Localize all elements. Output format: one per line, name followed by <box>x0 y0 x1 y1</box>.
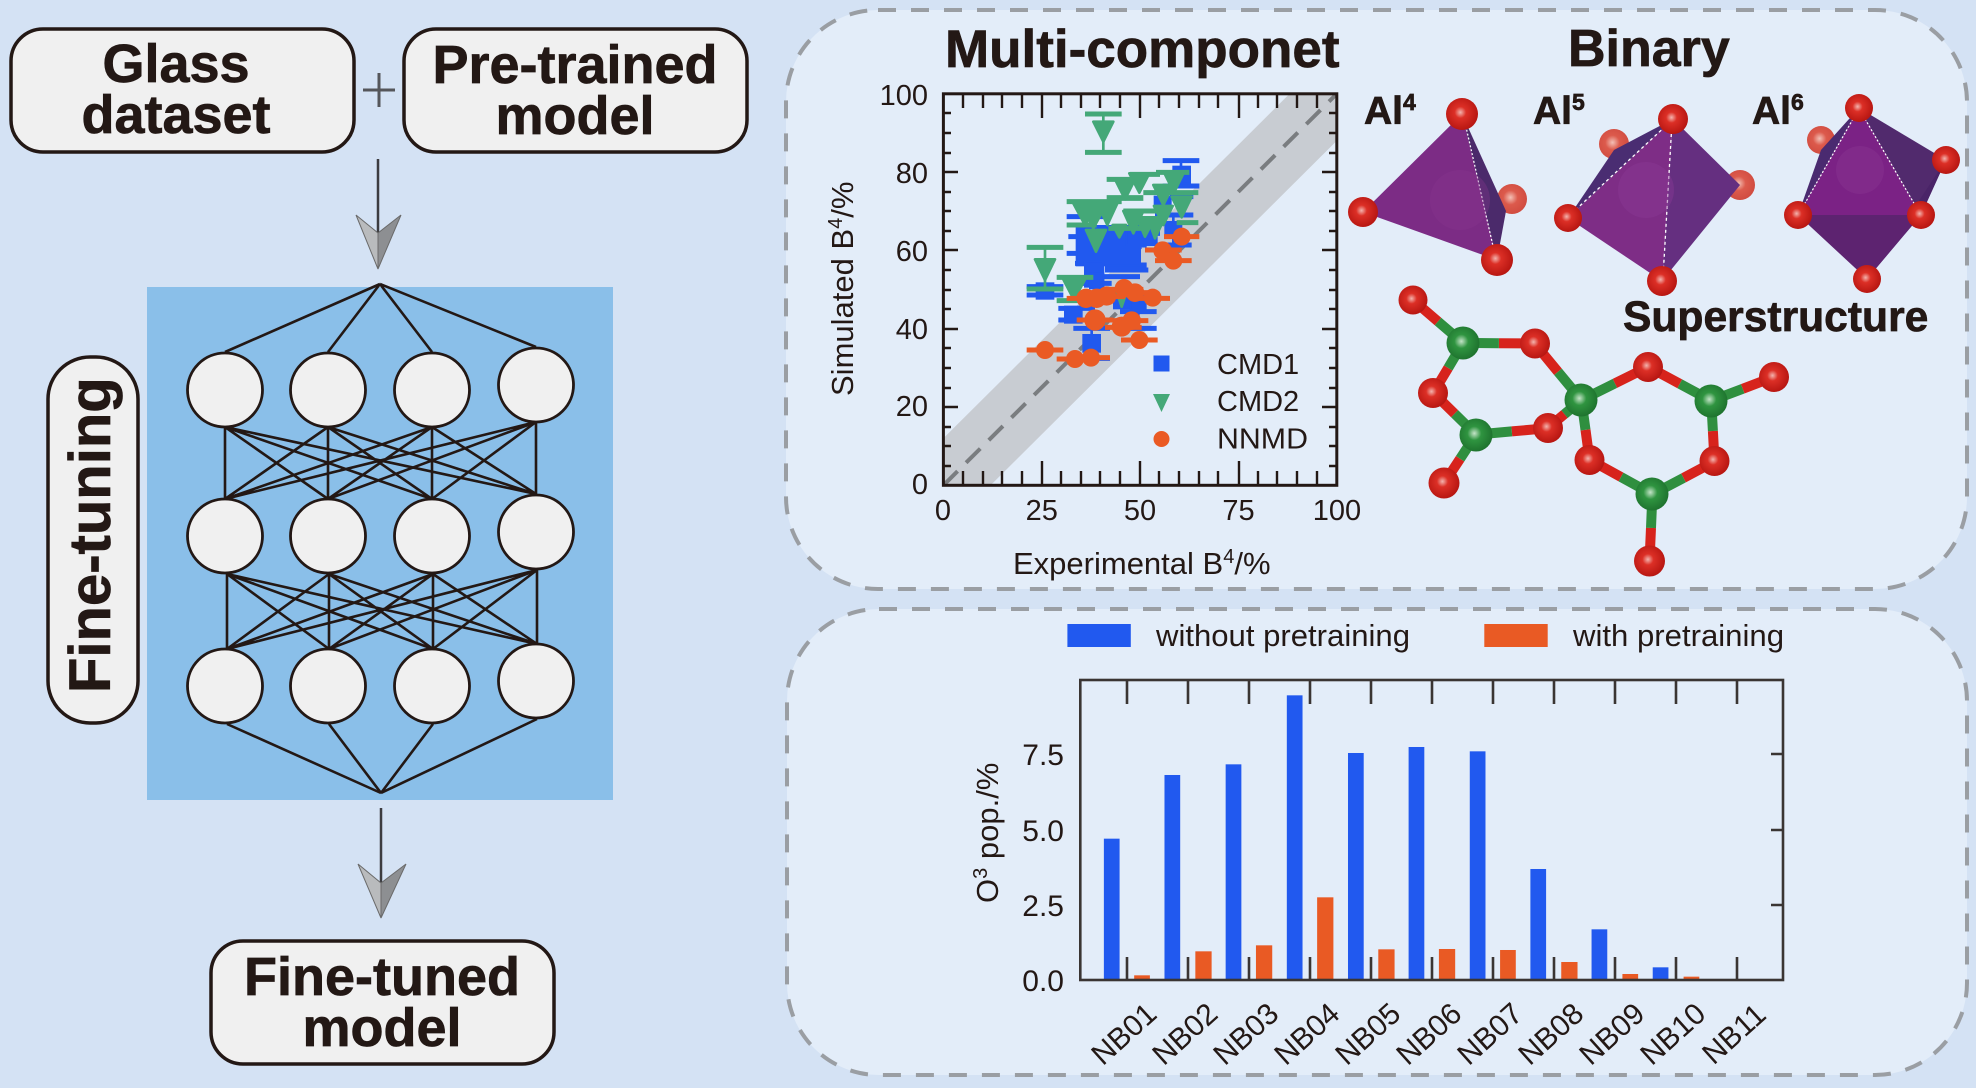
y tick labels: 80 <box>896 158 928 190</box>
y tick labels: 7.5 <box>1022 739 1064 772</box>
box: Fine-tuning <box>48 357 138 723</box>
category labels: NB05 <box>1329 997 1407 1072</box>
chart legend: without pretraining <box>1155 618 1410 653</box>
x tick labels <box>935 495 1361 527</box>
oxygen atoms <box>1398 286 1789 576</box>
chart legend: CMD1 <box>1217 349 1299 381</box>
box: Pre-trained model: model <box>495 86 655 146</box>
icon: Al5 polyhedron <box>1554 104 1755 296</box>
box: Fine-tuning: Fine-tuning <box>58 377 123 693</box>
data points <box>1027 114 1199 368</box>
box: Glass dataset: Glass <box>102 34 250 94</box>
box: Glass dataset <box>11 29 354 152</box>
y tick labels <box>880 80 928 501</box>
label: Al4: Al <box>1364 90 1403 133</box>
tolerance band <box>943 94 1337 485</box>
x tick labels: 50 <box>1124 495 1156 527</box>
bars: with pretraining <box>1134 897 1699 980</box>
network nodes <box>188 348 574 723</box>
box: Fine-tuned model: model <box>302 998 462 1058</box>
category labels: NB07 <box>1451 997 1529 1072</box>
category labels: NB02 <box>1146 997 1224 1072</box>
y axis title: /% <box>825 182 860 218</box>
x axis title: 4 <box>1223 546 1234 568</box>
label: Al5: 5 <box>1572 89 1585 115</box>
box: Fine-tuned model <box>211 941 554 1064</box>
axis ticks <box>943 94 1337 485</box>
box: Pre-trained model: Pre-trained <box>432 35 718 95</box>
axis frame and ticks <box>1080 680 1783 980</box>
arrow: network to fine-tuned model <box>358 808 406 918</box>
CMD2 series <box>1027 114 1198 307</box>
box: Glass dataset: dataset <box>81 85 271 145</box>
category labels: NB11 <box>1696 998 1772 1071</box>
panel: multi-component and binary <box>786 10 1967 589</box>
y axis title: O <box>970 879 1005 903</box>
chart legend <box>1153 349 1308 456</box>
label: Al5: Al <box>1533 90 1572 133</box>
y tick labels: 0 <box>912 469 928 501</box>
y tick labels: 2.5 <box>1022 890 1064 923</box>
category labels: NB03 <box>1207 997 1285 1072</box>
y tick labels: 5.0 <box>1022 815 1064 848</box>
x tick labels: 0 <box>935 495 951 527</box>
boron atoms <box>1446 326 1728 510</box>
x tick labels: 100 <box>1313 495 1361 527</box>
bars: without pretraining <box>1104 695 1668 980</box>
panel: neural network <box>147 284 613 800</box>
icon: plus sign <box>363 73 395 107</box>
category labels: NB09 <box>1573 997 1651 1072</box>
y axis title: 3 <box>970 868 992 879</box>
box: Fine-tuned model: Fine-tuned <box>244 947 520 1007</box>
y tick labels <box>1022 739 1064 998</box>
heading: Multi-componet: Multi-componet <box>945 20 1340 79</box>
category labels: NB06 <box>1390 997 1468 1072</box>
icon: superstructure molecule <box>1398 286 1789 576</box>
y axis title: 4 <box>825 218 847 229</box>
scatter chart: simulated vs experimental B4 <box>825 80 1361 581</box>
chart legend <box>1067 618 1784 653</box>
icon: Al4 tetrahedron <box>1348 98 1527 276</box>
network connections <box>225 284 537 793</box>
label: Al6: Al <box>1752 90 1791 133</box>
parity line <box>943 94 1337 485</box>
y axis title: pop./% <box>970 763 1005 868</box>
bonds <box>1413 300 1774 561</box>
category labels: NB10 <box>1634 997 1712 1072</box>
category labels: NB04 <box>1268 997 1346 1072</box>
x tick labels: 75 <box>1222 495 1255 527</box>
panel: O3 population bar chart <box>787 609 1967 1075</box>
category labels: NB01 <box>1085 997 1163 1072</box>
y tick labels: 20 <box>896 391 928 423</box>
CMD1 series <box>1027 161 1199 358</box>
y tick labels: 40 <box>896 314 928 346</box>
category labels: NB08 <box>1512 997 1590 1072</box>
heading: Binary: Binary <box>1568 20 1730 78</box>
x axis title: Experimental B <box>1013 546 1223 581</box>
y tick labels: 0.0 <box>1022 965 1064 998</box>
label: Al6: 6 <box>1791 89 1804 115</box>
arrow: inputs to network <box>356 159 401 269</box>
y tick labels: 60 <box>896 236 928 268</box>
x axis title: /% <box>1234 546 1271 581</box>
x tick labels: 25 <box>1026 495 1058 527</box>
y axis title: Simulated B <box>825 229 860 396</box>
category labels <box>1085 997 1772 1072</box>
chart legend: CMD2 <box>1217 386 1299 418</box>
box: Pre-trained model <box>404 29 747 152</box>
label: Al4: 4 <box>1403 89 1416 115</box>
chart legend: NNMD <box>1217 424 1308 456</box>
label: Superstructure: Superstructure <box>1623 293 1928 341</box>
y tick labels: 100 <box>880 80 928 112</box>
icon: Al6 octahedron <box>1784 94 1960 293</box>
chart legend: with pretraining <box>1572 618 1784 653</box>
plot frame <box>943 94 1337 485</box>
NNMD series <box>1027 228 1199 368</box>
